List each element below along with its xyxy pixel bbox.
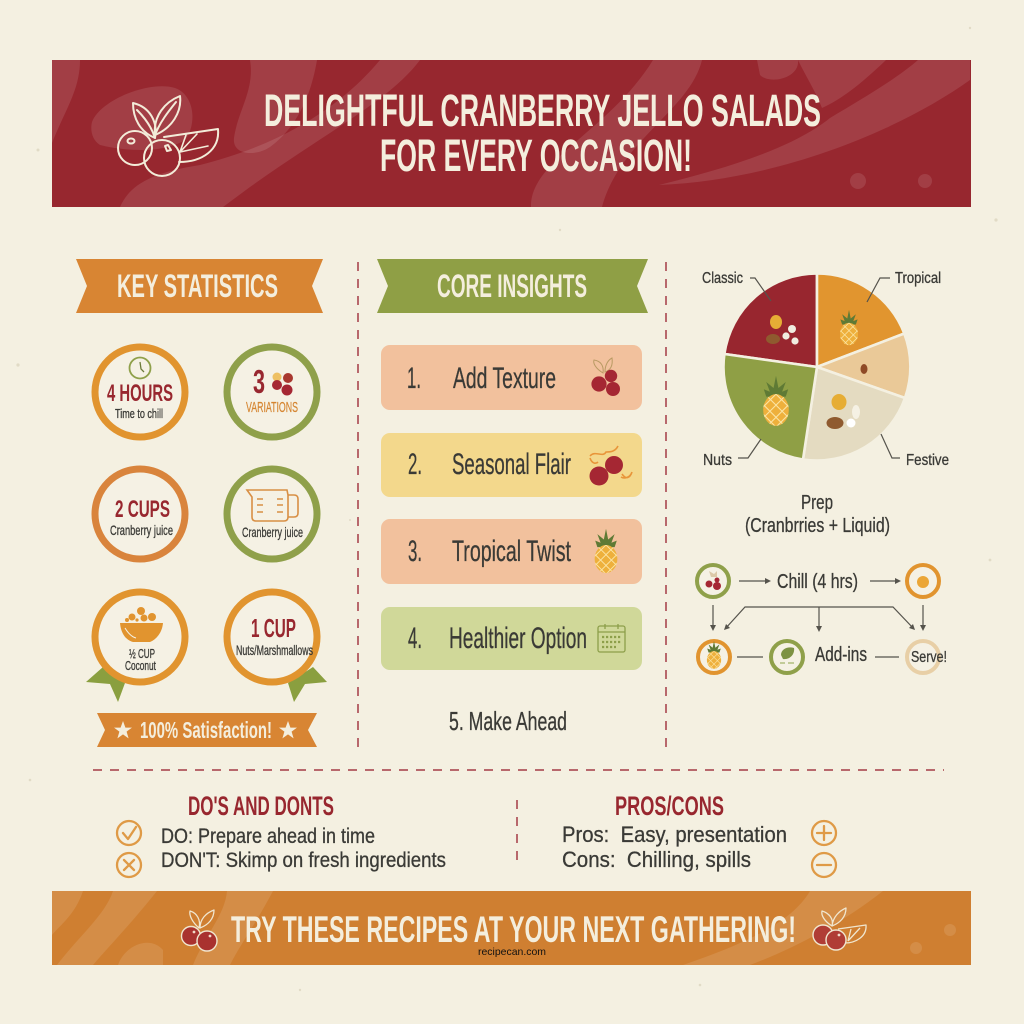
stat: half cup coconut: ½ CUP xyxy=(129,646,155,661)
prep heading: Prep xyxy=(801,492,833,514)
panel: pros and cons: Pros: Easy, presentation xyxy=(562,822,787,847)
satisfaction ribbon: 100% Satisfaction! xyxy=(140,717,272,743)
heading ribbon: core insights xyxy=(377,259,648,313)
panel: pros and cons: PROS/CONS xyxy=(615,791,724,821)
stat: 3 variations xyxy=(227,347,317,437)
stat: 2 cups xyxy=(95,469,185,559)
flow arrows xyxy=(710,578,926,657)
pie chart xyxy=(702,270,949,469)
panel: dos and donts: DON'T: Skimp on fresh ingredients xyxy=(161,849,446,872)
icon: check xyxy=(117,821,141,845)
pie labels: Tropical xyxy=(895,270,941,287)
flow node: orange xyxy=(907,565,939,597)
card: tropical twist: 3. xyxy=(408,535,422,568)
flow node: greens xyxy=(771,641,803,673)
card: healthier option: 4. xyxy=(408,622,422,655)
stat: 1 cup nuts and marshmallows xyxy=(227,592,327,702)
card: seasonal flair: Seasonal Flair xyxy=(452,448,571,481)
stat: 1 cup nuts and marshmallows: Nuts/Marshmallows xyxy=(236,642,313,658)
stat: 4 hours: 4 HOURS xyxy=(107,380,173,407)
stat: 4 hours xyxy=(95,347,185,437)
card: add texture xyxy=(381,345,642,410)
panel: dos and donts: DO'S AND DONTS xyxy=(188,791,334,821)
stat: half cup coconut xyxy=(86,592,185,702)
title text xyxy=(264,85,821,181)
icon: footer cherries and citrus right xyxy=(813,908,866,950)
card: seasonal flair: 2. xyxy=(408,448,422,481)
panel: pros and cons xyxy=(562,791,836,877)
card: healthier option xyxy=(381,607,642,670)
card: seasonal flair xyxy=(381,433,642,497)
panel: core insights xyxy=(377,259,648,736)
footer banner xyxy=(52,891,971,965)
flow labels: Add-ins xyxy=(815,644,867,666)
stat: 4 hours: Time to chill xyxy=(115,406,163,421)
flow node: serve xyxy=(907,641,947,673)
icon: cranberries xyxy=(591,358,620,396)
card: tropical twist: Tropical Twist xyxy=(452,535,571,568)
pie labels xyxy=(702,270,949,469)
satisfaction ribbon xyxy=(97,713,317,747)
flow diagram xyxy=(697,492,947,673)
heading ribbon: core insights: CORE INSIGHTS xyxy=(437,268,587,304)
card: tropical twist xyxy=(381,519,642,584)
title banner xyxy=(52,60,971,207)
stat: measuring cup xyxy=(227,469,317,559)
watermark: recipecan.com xyxy=(478,946,546,958)
title text: FOR EVERY OCCASION! xyxy=(380,130,692,181)
icon: pineapple xyxy=(591,529,621,576)
stat: 3 variations: 3 xyxy=(253,363,265,400)
flow node: cranberries xyxy=(697,565,729,597)
prep heading: (Cranbrries + Liquid) xyxy=(745,515,890,537)
item: make ahead: 5. Make Ahead xyxy=(449,706,567,736)
stat: 2 cups: Cranberry juice xyxy=(110,522,173,538)
panel: dos and donts xyxy=(117,791,446,877)
card: healthier option: Healthier Option xyxy=(449,622,587,655)
icon: calendar xyxy=(598,624,625,652)
panel: key statistics xyxy=(76,259,327,747)
icon: minus xyxy=(812,853,836,877)
heading ribbon: key statistics xyxy=(76,259,323,313)
stat: 1 cup nuts and marshmallows: 1 CUP xyxy=(251,613,296,643)
panel: pros and cons: Cons: Chilling, spills xyxy=(562,847,751,872)
card: add texture: Add Texture xyxy=(453,362,556,395)
pie labels: Nuts xyxy=(703,452,732,469)
flow node: serve: Serve! xyxy=(911,649,947,666)
icon: plus xyxy=(812,821,836,845)
pie labels: Classic xyxy=(702,270,743,287)
stat: 2 cups: 2 CUPS xyxy=(115,496,170,523)
stat: 3 variations: VARIATIONS xyxy=(246,399,298,416)
icon: cross xyxy=(117,853,141,877)
flow labels xyxy=(777,571,867,666)
flow labels: Chill (4 hrs) xyxy=(777,571,858,593)
heading ribbon: key statistics: KEY STATISTICS xyxy=(117,268,278,304)
card: add texture: 1. xyxy=(407,362,421,395)
icon: cranberries with orange peel xyxy=(590,446,632,486)
flow node: pineapple xyxy=(698,641,730,673)
pie labels: Festive xyxy=(906,452,949,469)
stat: half cup coconut: Coconut xyxy=(125,658,156,673)
prep heading xyxy=(745,492,890,537)
stat: measuring cup: Cranberry juice xyxy=(242,524,303,540)
panel: dos and donts: DO: Prepare ahead in time xyxy=(161,825,375,848)
icon: footer cherries left xyxy=(182,910,217,951)
icon: cranberries and citrus slice xyxy=(118,96,218,176)
